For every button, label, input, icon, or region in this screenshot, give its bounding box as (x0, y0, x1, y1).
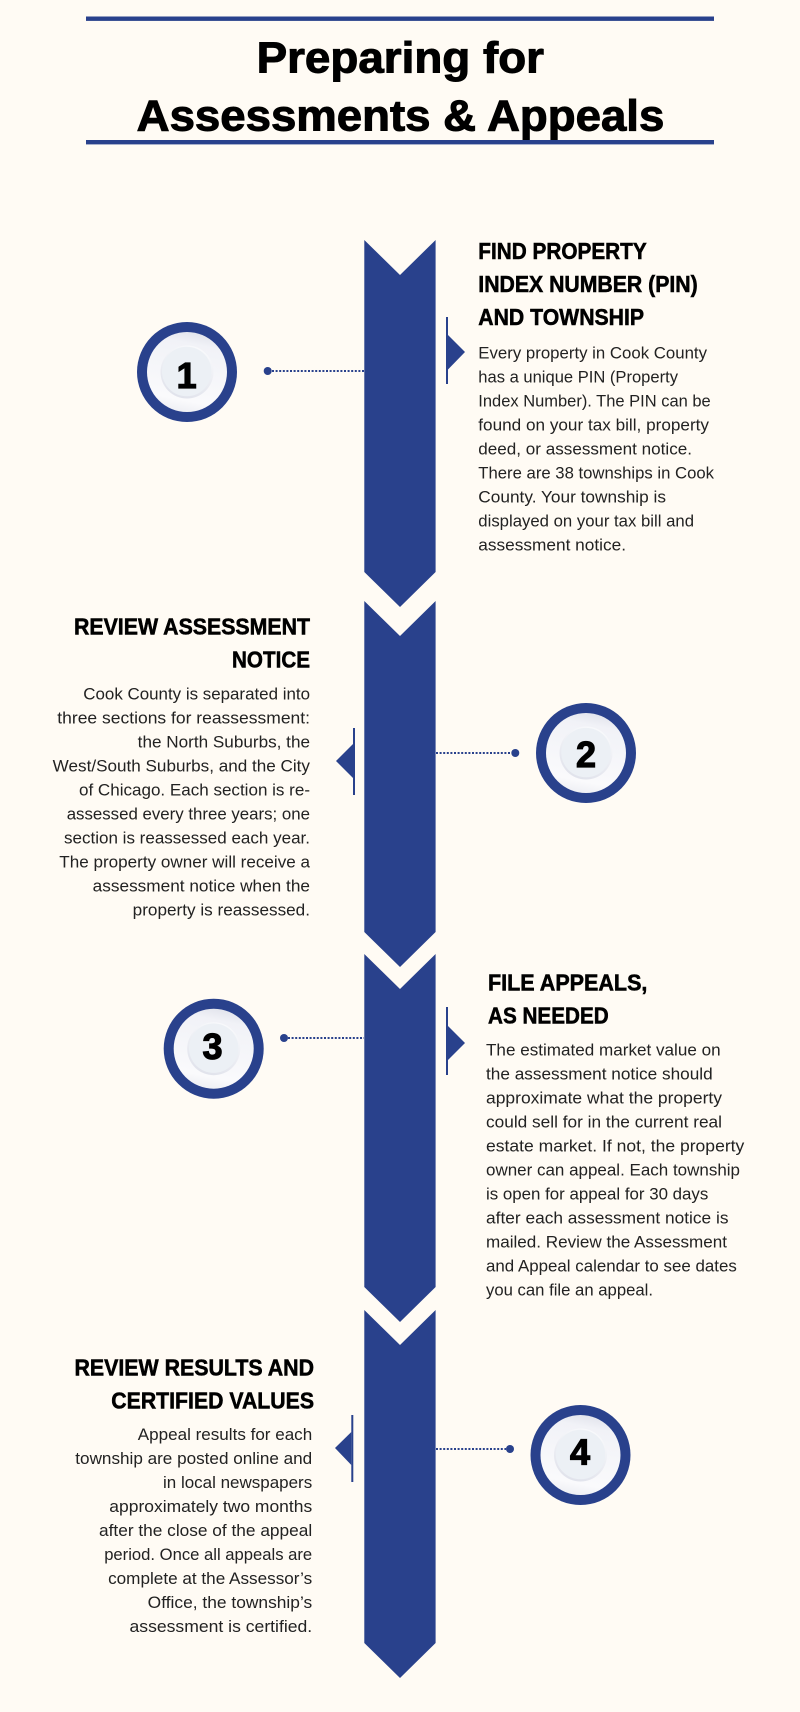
step 3 heading: AS NEEDED (488, 1002, 609, 1028)
step 1 pointer (446, 317, 465, 384)
step 1 body: displayed on your tax bill and (478, 511, 694, 530)
step 1 body: Every property in Cook County (478, 343, 707, 362)
step 3 pointer (446, 1007, 465, 1075)
step 1 badge (137, 322, 237, 422)
step 2 pointer (336, 728, 355, 795)
step 2 body: Cook County is separated into (83, 684, 310, 703)
step 1 badge: 1 (177, 355, 197, 396)
step 2 badge (536, 703, 636, 803)
step 3 body: owner can appeal. Each township (486, 1160, 740, 1179)
step 1 heading: AND TOWNSHIP (478, 304, 644, 330)
step 4 text (74, 1354, 314, 1636)
step 2 heading: NOTICE (232, 647, 310, 673)
step 3 badge (164, 999, 264, 1099)
step 3 body: The estimated market value on (486, 1040, 721, 1059)
step 2 connector (436, 749, 519, 757)
step 3 body: and Appeal calendar to see dates (486, 1256, 737, 1275)
step 1 body: deed, or assessment notice. (478, 439, 692, 458)
central arrow timeline (364, 240, 436, 1678)
step 3 heading: FILE APPEALS, (488, 970, 647, 996)
step 4 body: approximately two months (109, 1497, 312, 1516)
step 1 body: Index Number). The PIN can be (478, 391, 711, 410)
step 3 body: after each assessment notice is (486, 1208, 728, 1227)
step 2 body: assessment notice when the (93, 876, 310, 895)
step 2 body: assessed every three years; one (67, 804, 310, 823)
step 2 body: of Chicago. Each section is re- (79, 780, 310, 799)
title block: Assessments & Appeals (137, 92, 664, 141)
step 1 heading: FIND PROPERTY (478, 238, 647, 264)
step 4 badge (530, 1405, 630, 1505)
step 2 body: property is reassessed. (133, 900, 310, 919)
step 3 text (486, 970, 745, 1299)
step 1 body: has a unique PIN (Property (478, 367, 678, 386)
step 2 heading (74, 614, 310, 673)
step 4 pointer (335, 1415, 353, 1482)
step 4 body: township are posted online and (75, 1449, 312, 1468)
step 4 body: after the close of the appeal (99, 1521, 312, 1540)
title block: Preparing for (257, 34, 544, 83)
step 3 body: mailed. Review the Assessment (486, 1232, 727, 1251)
step 3 body: could sell for in the current real (486, 1112, 722, 1131)
step 2 body (53, 684, 311, 919)
step 1 heading (478, 238, 698, 330)
step 3 body (486, 1040, 745, 1299)
step 4 badge: 4 (570, 1432, 590, 1472)
step 3 body: is open for appeal for 30 days (486, 1184, 708, 1203)
step 2 heading: REVIEW ASSESSMENT (74, 614, 310, 640)
step 4 body: in local newspapers (163, 1473, 312, 1492)
step 3 body: you can file an appeal. (486, 1280, 653, 1299)
title block (86, 16, 714, 144)
step 4 body (75, 1425, 312, 1636)
step 3 body: the assessment notice should (486, 1064, 713, 1083)
step 4 body: Office, the township’s (148, 1593, 312, 1612)
step 3 connector (280, 1034, 364, 1042)
step 4 body: Appeal results for each (138, 1425, 312, 1444)
step 3 heading (488, 970, 647, 1028)
step 2 body: the North Suburbs, the (138, 732, 310, 751)
step 2 body: section is reassessed each year. (64, 828, 310, 847)
step 2 badge: 2 (576, 734, 596, 775)
step 3 body: estate market. If not, the property (486, 1136, 745, 1155)
step 2 body: West/South Suburbs, and the City (53, 756, 310, 775)
step 3 badge: 3 (202, 1026, 223, 1067)
step 4 heading (74, 1354, 314, 1413)
step 1 body: found on your tax bill, property (478, 415, 710, 434)
step 2 text (53, 614, 311, 919)
step 1 body: County. Your township is (478, 487, 666, 506)
step 1 body: There are 38 townships in Cook (478, 463, 714, 482)
step 4 connector (436, 1445, 514, 1453)
step 1 connector (264, 367, 364, 375)
step 4 body: assessment is certified. (130, 1617, 312, 1636)
step 1 text (478, 238, 714, 554)
step 4 body: complete at the Assessor’s (108, 1569, 312, 1588)
step 4 body: period. Once all appeals are (104, 1545, 312, 1564)
step 4 heading: CERTIFIED VALUES (111, 1387, 314, 1413)
step 3 body: approximate what the property (486, 1088, 723, 1107)
step 2 body: The property owner will receive a (59, 852, 311, 871)
step 1 body (478, 343, 714, 554)
step 1 heading: INDEX NUMBER (PIN) (478, 271, 698, 297)
step 1 body: assessment notice. (478, 535, 626, 554)
step 4 heading: REVIEW RESULTS AND (74, 1354, 314, 1380)
step 2 body: three sections for reassessment: (57, 708, 310, 727)
